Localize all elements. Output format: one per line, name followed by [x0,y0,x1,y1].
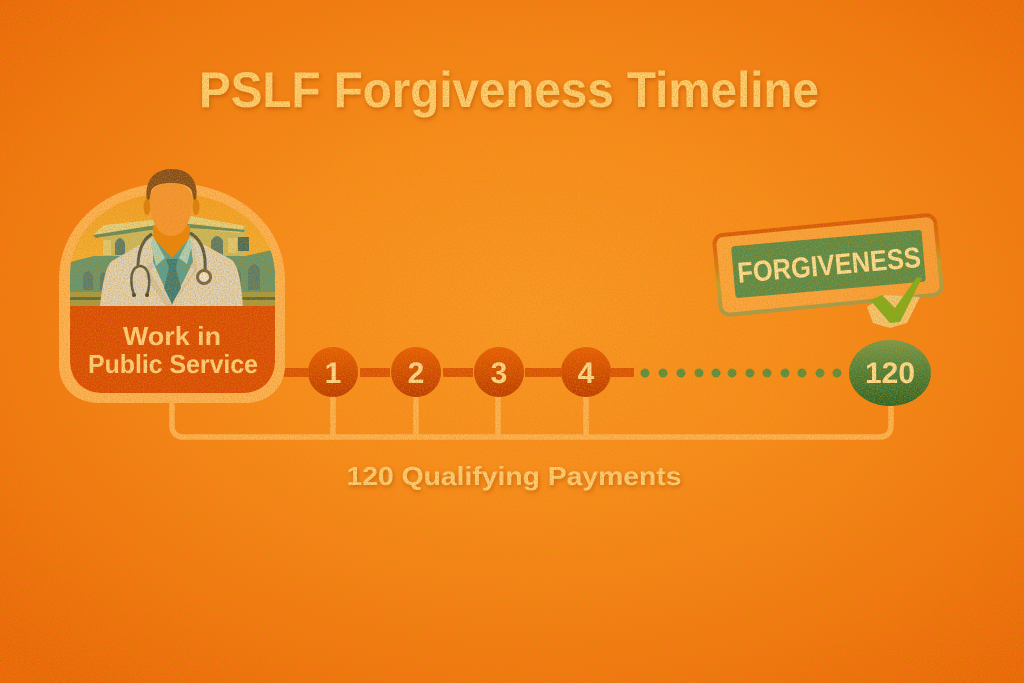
bracket: 120 qualifying payments span [172,396,891,437]
label band [70,306,275,393]
icon: doctor [100,169,243,306]
panel: work in public service [59,169,285,403]
panel: work in public service: Public Service [88,349,258,379]
title: PSLF Forgiveness Timeline [199,62,819,118]
tie [164,259,181,304]
stamp banner [731,230,926,298]
stethoscope [138,234,152,267]
step 3: 3 [491,357,507,390]
forgiveness stamp [714,215,942,328]
coat [100,237,243,306]
step 1: 1 [325,357,341,390]
panel frame [59,183,285,403]
timeline connector segments [283,368,634,377]
step 1 [308,347,358,397]
stamp frame [714,215,942,315]
milestone 120: 120 [865,357,915,390]
shirt [153,238,193,304]
milestone 120 [849,340,931,406]
step 3 [474,347,524,397]
icon: check mark [867,277,922,328]
neck [153,225,190,259]
icon: public building [70,216,280,306]
face [150,183,192,236]
label text: Work in [123,321,221,351]
step 4 [561,347,611,397]
ears [144,199,150,215]
lapels [146,236,197,306]
step 2: 2 [408,357,424,390]
illustration backdrop [70,193,275,306]
payments label: 120 Qualifying Payments [346,461,682,491]
hair [147,169,197,206]
step 4: 4 [578,357,595,390]
stamp banner: FORGIVENESS [736,242,922,290]
step 2 [391,347,441,397]
dotted progress [640,368,842,378]
